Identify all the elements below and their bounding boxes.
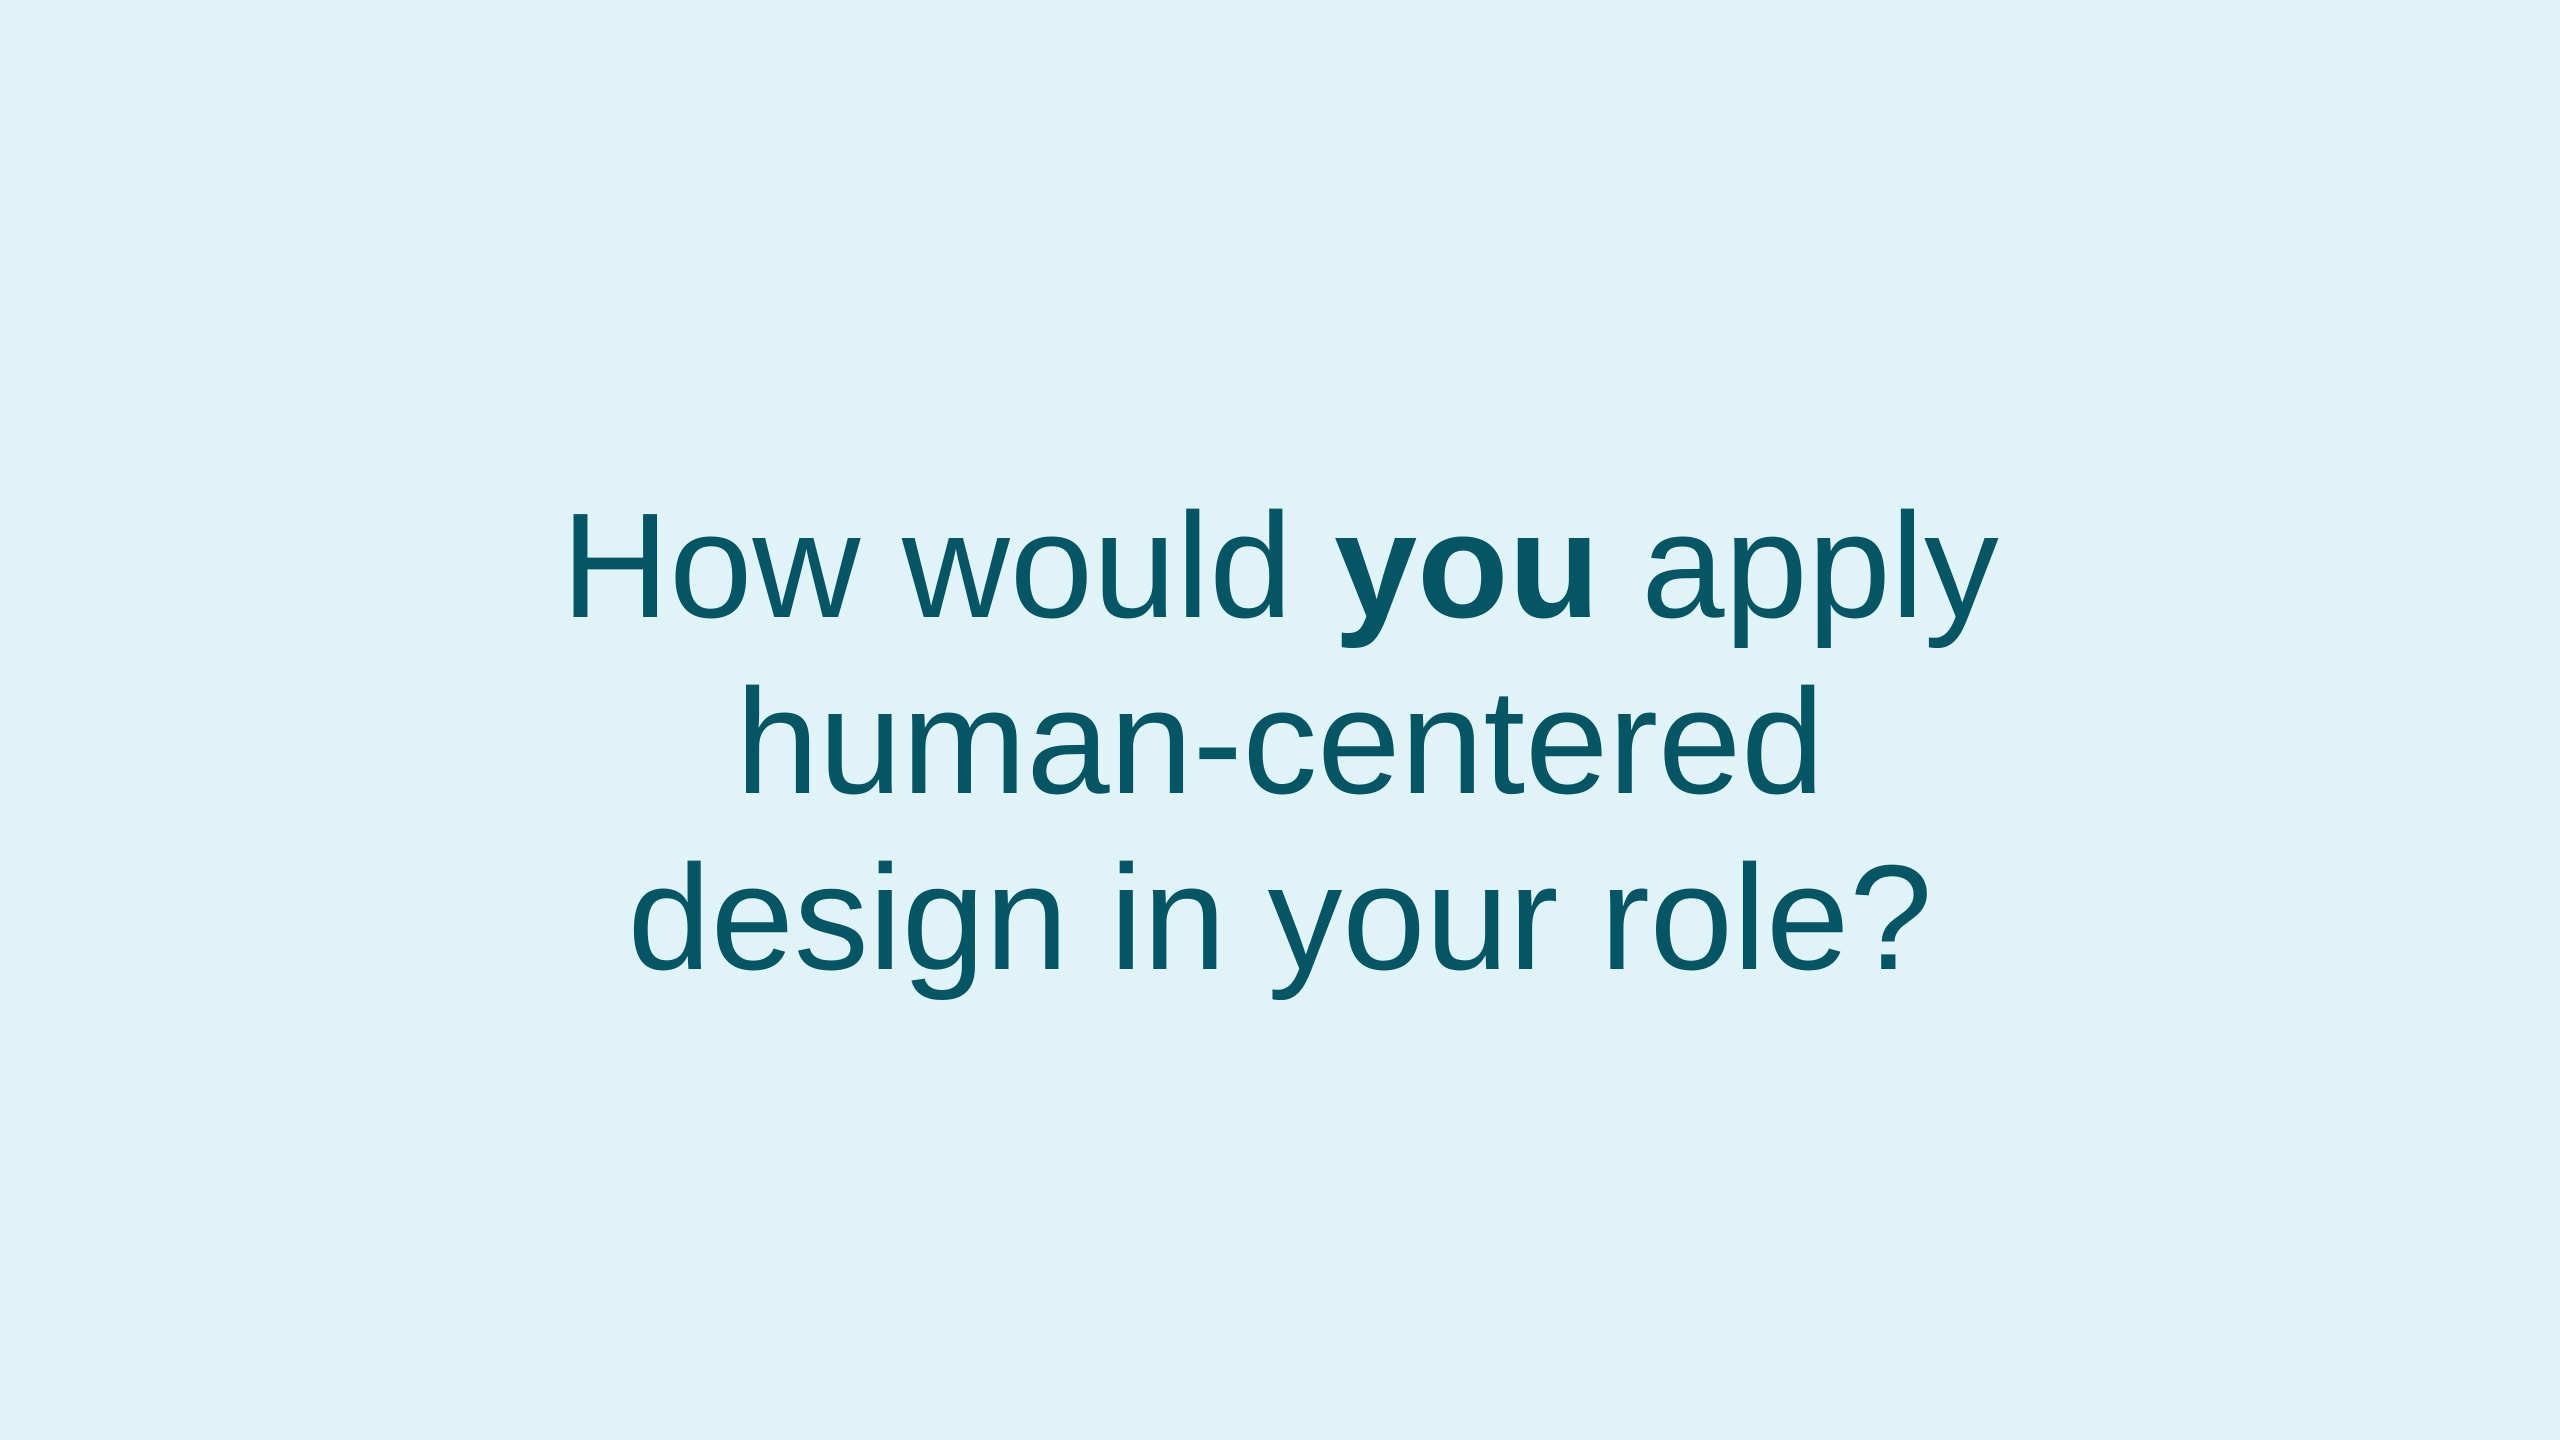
title: question text: human-centered <box>736 658 1824 825</box>
title: question text: design in your role? <box>628 834 1932 1001</box>
title: question text: How would you apply <box>561 482 1999 649</box>
title: question text <box>561 482 1999 1001</box>
